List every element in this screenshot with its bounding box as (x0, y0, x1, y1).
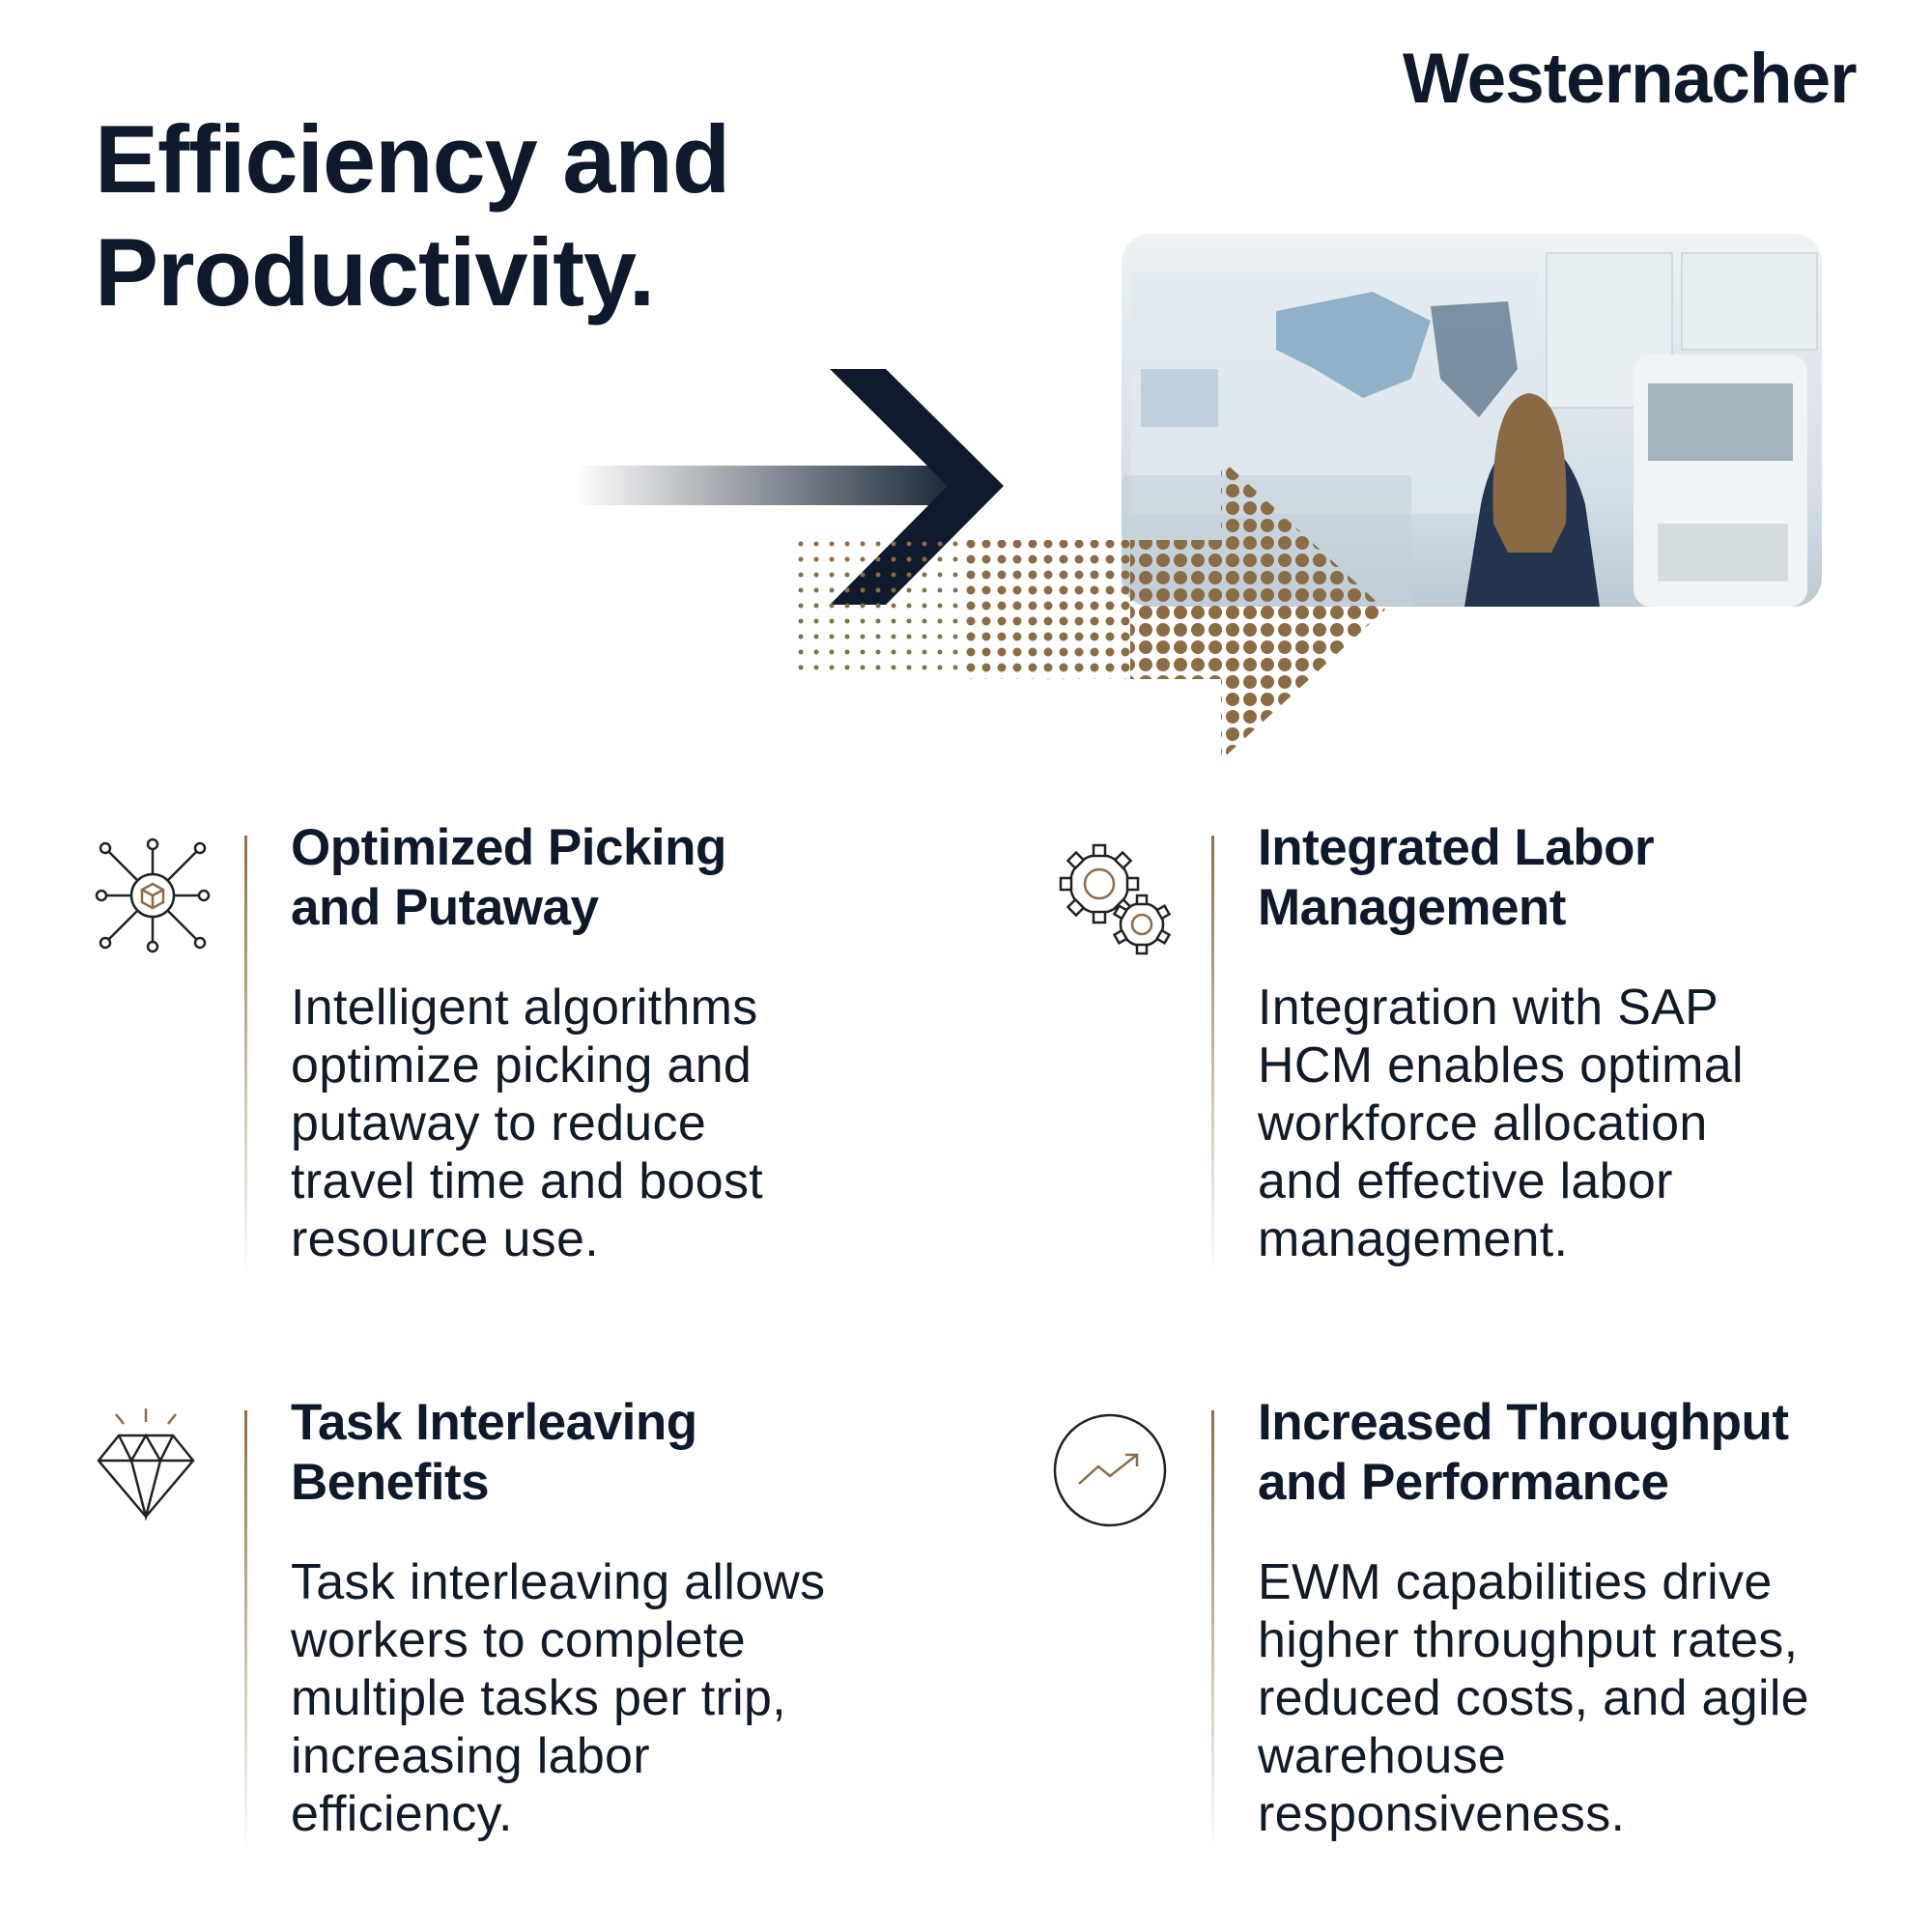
text: Task interleaving allows (291, 1554, 825, 1610)
text: and Performance (1258, 1454, 1668, 1511)
text (291, 819, 763, 1267)
hero photo (1122, 234, 1822, 607)
text: workers to complete (291, 1612, 746, 1668)
title (95, 105, 729, 326)
text: reduced costs, and agile (1258, 1670, 1809, 1726)
text: management. (1258, 1211, 1568, 1267)
text: resource use. (291, 1211, 599, 1267)
text: increasing labor (291, 1728, 650, 1784)
title: Productivity. (95, 218, 654, 326)
text: Management (1258, 879, 1566, 936)
woman (1464, 437, 1600, 607)
text: and Putaway (291, 879, 598, 936)
icon: trend circle (1053, 1414, 1167, 1526)
text: Integrated Labor (1258, 819, 1654, 876)
panel: interleaving (97, 1394, 825, 1842)
icon: diamond (97, 1408, 195, 1520)
text: Optimized Picking (291, 819, 726, 876)
text: HCM enables optimal (1258, 1037, 1744, 1094)
truck (1634, 355, 1807, 607)
panel: throughput (1053, 1394, 1809, 1842)
text: higher throughput rates, (1258, 1612, 1798, 1668)
text: responsiveness. (1258, 1786, 1625, 1842)
icon: gears (1059, 844, 1171, 954)
text: Task Interleaving (291, 1394, 697, 1451)
text: warehouse (1258, 1728, 1506, 1784)
text: workforce allocation (1258, 1095, 1708, 1151)
text: EWM capabilities drive (1258, 1554, 1773, 1610)
text: Intelligent algorithms (291, 980, 758, 1036)
text: optimize picking and (291, 1037, 752, 1094)
text (290, 1394, 825, 1842)
text: Integration with SAP (1258, 980, 1719, 1036)
text: putaway to reduce (291, 1095, 706, 1151)
text: travel time and boost (291, 1153, 763, 1209)
icon: network box (95, 838, 211, 952)
text (1258, 819, 1744, 1267)
text: Increased Throughput (1258, 1394, 1788, 1451)
logo: Westernacher (1403, 40, 1857, 118)
text: efficiency. (291, 1786, 513, 1842)
title: Efficiency and (95, 105, 729, 213)
text: and effective labor (1258, 1153, 1673, 1209)
text: Benefits (291, 1454, 489, 1511)
panel: picking (95, 819, 763, 1267)
text (1258, 1394, 1809, 1842)
text: multiple tasks per trip, (291, 1670, 786, 1726)
panel: labor (1059, 819, 1744, 1267)
